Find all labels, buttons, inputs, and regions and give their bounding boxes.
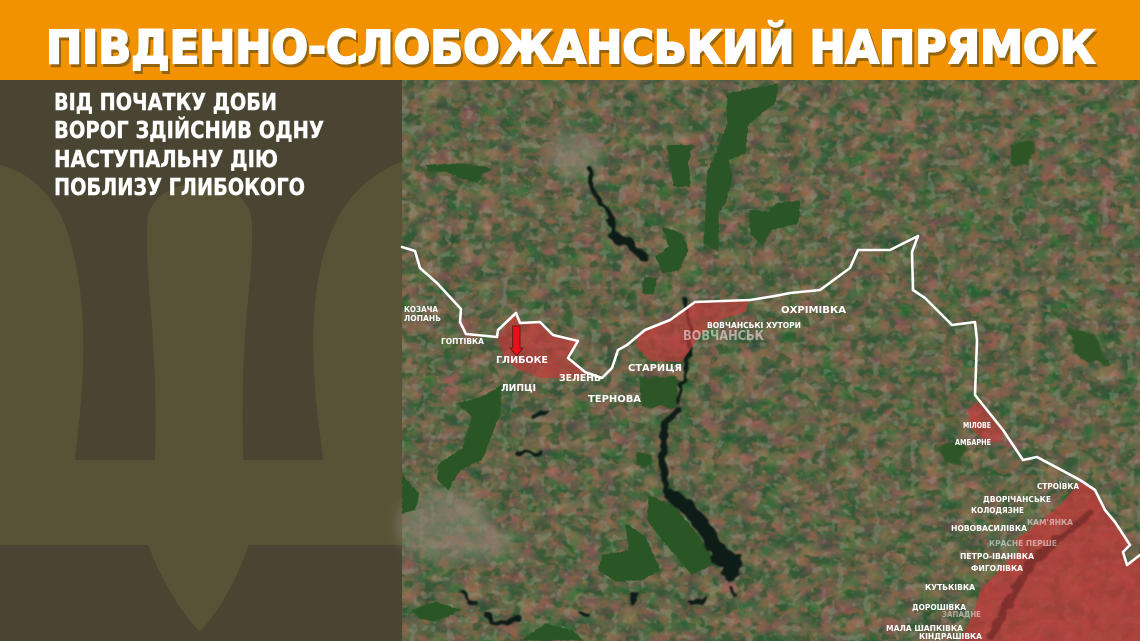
label: Зелень: ЗЕЛЕНЬ bbox=[559, 373, 601, 384]
label: Кам'янка: КАМ'ЯНКА bbox=[1027, 518, 1073, 527]
title: ПІВДЕННО-СЛОБОЖАНСЬКИЙ НАПРЯМОК bbox=[48, 24, 1097, 77]
label: Нововасилівка: НОВОВАСИЛІВКА bbox=[951, 524, 1027, 533]
label: Западне: ЗАПАДНЕ bbox=[942, 610, 981, 619]
label: Гоптівка: ГОПТІВКА bbox=[441, 337, 484, 346]
label: Кіндрашівка: КІНДРАШІВКА bbox=[919, 632, 982, 641]
title: ПІВДЕННО-СЛОБОЖАНСЬКИЙ НАПРЯМОК bbox=[46, 21, 1095, 74]
map labels bbox=[404, 305, 1079, 641]
label: Вовчанськ: ВОВЧАНСЬК bbox=[683, 329, 764, 344]
label: Козача Лопань: ЛОПАНЬ bbox=[404, 314, 441, 323]
label: Липці: ЛИПЦІ bbox=[501, 383, 536, 394]
river and reservoirs bbox=[462, 168, 735, 623]
label: Колодязне: КОЛОДЯЗНЕ bbox=[971, 506, 1024, 515]
urban areas bbox=[397, 131, 603, 561]
icon: trident emblem watermark bbox=[0, 162, 402, 632]
text block: summary bbox=[54, 90, 324, 201]
state border line bbox=[402, 236, 1140, 565]
label: Стариця: СТАРИЦЯ bbox=[628, 363, 682, 374]
label: Амбарне: АМБАРНЕ bbox=[955, 438, 991, 447]
label: Фиголівка: ФИГОЛІВКА bbox=[971, 564, 1023, 573]
text block: summary: НАСТУПАЛЬНУ ДІЮ bbox=[54, 147, 278, 173]
panel: satellite map bbox=[397, 80, 1140, 641]
text block: summary: ВІД ПОЧАТКУ ДОБИ bbox=[54, 90, 277, 116]
label: Тернова: ТЕРНОВА bbox=[588, 394, 641, 405]
label: Петро-Іванівка: ПЕТРО-ІВАНІВКА bbox=[960, 552, 1034, 561]
label: Кутьківка: КУТЬКІВКА bbox=[925, 583, 975, 592]
label: Мала Шапківка: МАЛА ШАПКІВКА bbox=[886, 624, 963, 633]
forests east bbox=[640, 140, 1110, 465]
label: Дворічанське: ДВОРІЧАНСЬКЕ bbox=[983, 495, 1051, 504]
zone: Мілове bbox=[968, 403, 1003, 442]
label: Красне Перше: КРАСНЕ ПЕРШЕ bbox=[989, 539, 1057, 548]
zone: Вовчанськ bbox=[635, 300, 750, 362]
arrow: attack direction bbox=[510, 326, 523, 356]
label: Охрімівка: ОХРІМІВКА bbox=[781, 305, 846, 316]
label: Строївка: СТРОЇВКА bbox=[1037, 482, 1079, 491]
label: Глибоке: ГЛИБОКЕ bbox=[496, 355, 548, 366]
occupied zones (red) bbox=[497, 300, 1140, 641]
label: Козача Лопань bbox=[404, 305, 441, 323]
label: Вовчанські Хутори: ВОВЧАНСЬКІ ХУТОРИ bbox=[707, 321, 801, 330]
forests north bbox=[425, 83, 800, 295]
zone: south-east front bbox=[960, 482, 1140, 641]
header band bbox=[0, 0, 1140, 80]
zone: Глибоке bbox=[497, 313, 585, 378]
text block: summary: ПОБЛИЗУ ГЛИБОКОГО bbox=[54, 175, 305, 201]
label: Мілове: МІЛОВЕ bbox=[963, 421, 991, 430]
label: Дорошівка: ДОРОШІВКА bbox=[912, 603, 966, 612]
left panel background bbox=[0, 80, 402, 641]
forests south bbox=[402, 380, 717, 640]
label: Козача Лопань: КОЗАЧА bbox=[404, 305, 438, 314]
text block: summary: ВОРОГ ЗДІЙСНИВ ОДНУ bbox=[54, 116, 324, 144]
